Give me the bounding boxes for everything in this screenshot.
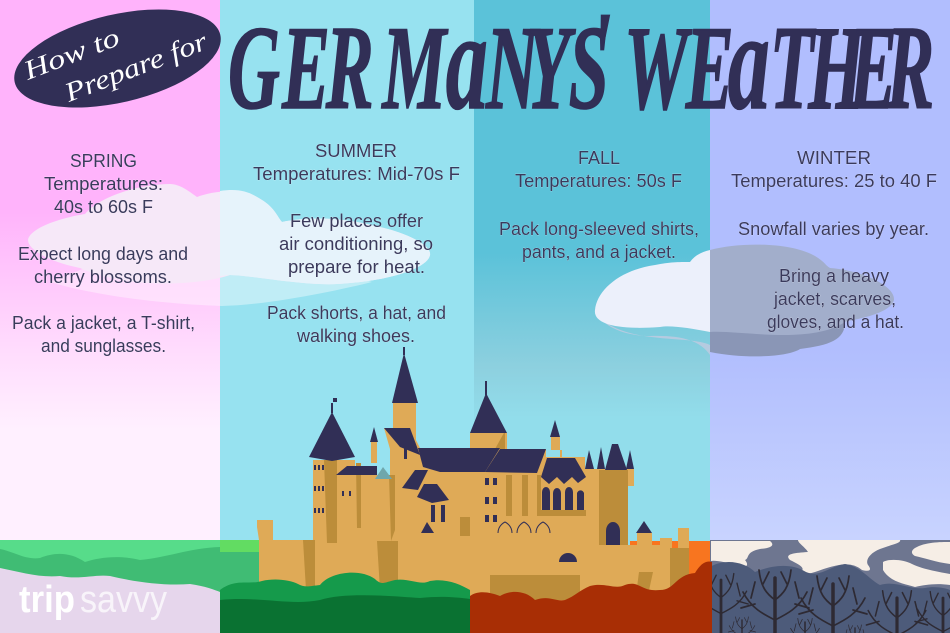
text: spring: cherry blossoms. [34,267,172,287]
title oval: How to Prepare for [5,0,230,125]
text: winter [731,148,937,332]
text: summer [253,141,460,346]
text: summer: Temperatures: Mid-70s F [253,164,460,184]
panel: spring background [0,0,220,633]
text: spring: Pack a jacket, a T-shirt, [12,313,195,333]
text: winter: Snowfall varies by year. [738,219,929,239]
cloud: fall and winter [595,245,894,356]
text: spring: Expect long days and [18,244,188,264]
text: fall: Pack long-sleeved shirts, [499,219,699,239]
text: summer: Few places offer [290,211,423,231]
text: winter: WINTER [797,148,871,168]
text: spring [12,151,195,356]
text: fall: Temperatures: 50s F [515,171,682,191]
logo: tripsavvy: savvy [80,579,167,621]
logo: tripsavvy: trip [19,579,75,621]
castle roofs and spires [309,347,652,562]
winter ground [694,540,950,633]
bushes: summer green [220,573,470,633]
text: fall: FALL [578,148,620,168]
castle arches [498,522,550,533]
panel: winter background [710,0,950,633]
text: winter: Temperatures: 25 to 40 F [731,171,937,191]
text: spring: 40s to 60s F [54,197,153,217]
panel: summer background [220,0,474,633]
text: spring: and sunglasses. [41,336,166,356]
logo: tripsavvy [19,579,167,621]
spring meadow [0,540,220,633]
text: fall: pants, and a jacket. [522,242,676,262]
bushes: fall red [470,562,712,633]
text: summer: SUMMER [315,141,397,161]
title oval: How to Prepare for: Prepare for [59,26,212,108]
text: summer: air conditioning, so [279,234,433,254]
castle body [257,433,689,610]
castle teal gable [375,467,392,479]
text: spring: Temperatures: [44,174,163,194]
text: fall [499,148,699,262]
bare trees [694,570,950,633]
panel: fall background [474,0,710,633]
cloud: spring and summer [28,184,430,306]
text: spring: SPRING [70,151,137,171]
castle [257,347,689,610]
text: winter: gloves, and a hat. [767,312,904,332]
text: summer: prepare for heat. [288,257,425,277]
fall ground strip [630,541,710,601]
text: winter: Bring a heavy [779,266,889,286]
text: winter: jacket, scarves, [773,289,896,309]
summer meadow strip [220,540,270,602]
text: summer: Pack shorts, a hat, and [267,303,446,323]
text: summer: walking shoes. [296,326,415,346]
title oval: How to Prepare for: How to [18,22,124,86]
castle shadows [303,431,689,600]
